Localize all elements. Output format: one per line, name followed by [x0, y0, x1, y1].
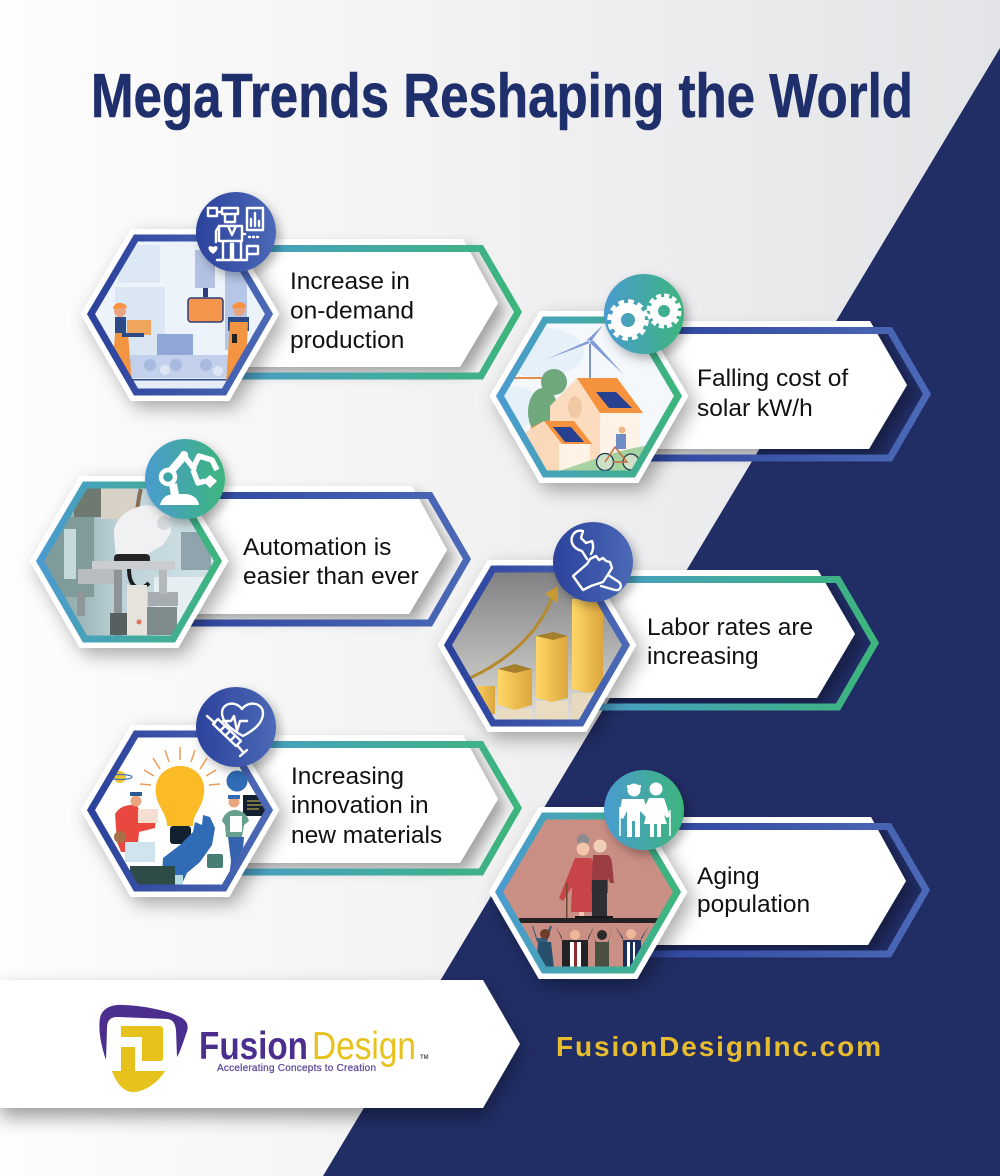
wordmark: Fusion	[199, 1025, 308, 1068]
label text: Aging	[697, 863, 760, 890]
label text: production	[290, 327, 404, 354]
label text: solar kW/h	[697, 395, 813, 422]
hexagon border	[91, 238, 269, 392]
navy diagonal panel	[323, 48, 1000, 1176]
hexagon border	[499, 816, 677, 970]
illustration: elders supported by workers	[503, 820, 673, 966]
banner	[200, 735, 498, 863]
banner	[608, 817, 906, 945]
banner outline	[200, 744, 518, 872]
hexagon frame	[40, 485, 218, 639]
illustration: factory workers	[95, 242, 265, 388]
illustration: light bulb team	[113, 747, 265, 884]
label text: Increasing	[291, 763, 404, 790]
hexagon frame	[91, 238, 269, 392]
banner outline	[200, 248, 518, 376]
banner outline	[609, 330, 927, 458]
label text: new materials	[291, 822, 442, 849]
icon badge: elderly couple	[604, 770, 684, 850]
card: increase in on-demand production	[90, 192, 518, 393]
label text: innovation in	[291, 792, 429, 819]
hexagon frame	[91, 734, 269, 888]
card: aging population	[498, 770, 926, 971]
hexagon border	[500, 320, 678, 474]
illustration: solar house	[504, 324, 674, 470]
hexagon border	[40, 485, 218, 639]
banner	[609, 321, 907, 449]
card: labor rates	[447, 522, 875, 724]
icon badge: heart and syringe	[196, 687, 276, 767]
hexagon frame	[500, 320, 678, 474]
label text: Automation is	[243, 534, 391, 561]
label text: Labor rates are	[647, 614, 813, 641]
label text: easier than ever	[243, 563, 419, 590]
footer band	[0, 980, 520, 1108]
tagline: Accelerating Concepts to Creation	[217, 1063, 376, 1074]
banner	[200, 239, 498, 367]
banner outline	[149, 496, 467, 623]
icon badge: robot arm	[145, 439, 225, 519]
trademark: TM	[420, 1055, 429, 1061]
label text: Falling cost of	[697, 365, 848, 392]
website url: FusionDesignInc.com	[556, 1031, 881, 1062]
hexagon frame	[499, 816, 677, 970]
illustration: gold bar chart	[452, 572, 622, 720]
card: falling cost of solar	[486, 274, 927, 475]
label text: population	[697, 891, 810, 918]
card: innovation in new materials	[90, 687, 518, 889]
icon badge: hand with wrench	[553, 522, 633, 602]
hexagon frame	[448, 569, 626, 723]
icon badge: gears	[604, 274, 684, 354]
logo mark	[99, 1005, 188, 1092]
icon badge: robot blueprint	[196, 192, 276, 272]
hexagon border	[91, 734, 269, 888]
card: automation	[39, 439, 467, 640]
illustration: robot arm photo	[44, 488, 214, 636]
banner	[557, 570, 855, 698]
wordmark second part: Design	[312, 1025, 416, 1068]
banner	[149, 486, 447, 614]
banner outline	[557, 580, 875, 707]
banner outline	[608, 826, 926, 954]
label text: on-demand	[290, 298, 414, 324]
logo: Fusion Design	[99, 1005, 429, 1092]
hexagon border	[448, 569, 626, 723]
label text: increasing	[647, 643, 759, 670]
label text: Increase in	[290, 268, 410, 295]
